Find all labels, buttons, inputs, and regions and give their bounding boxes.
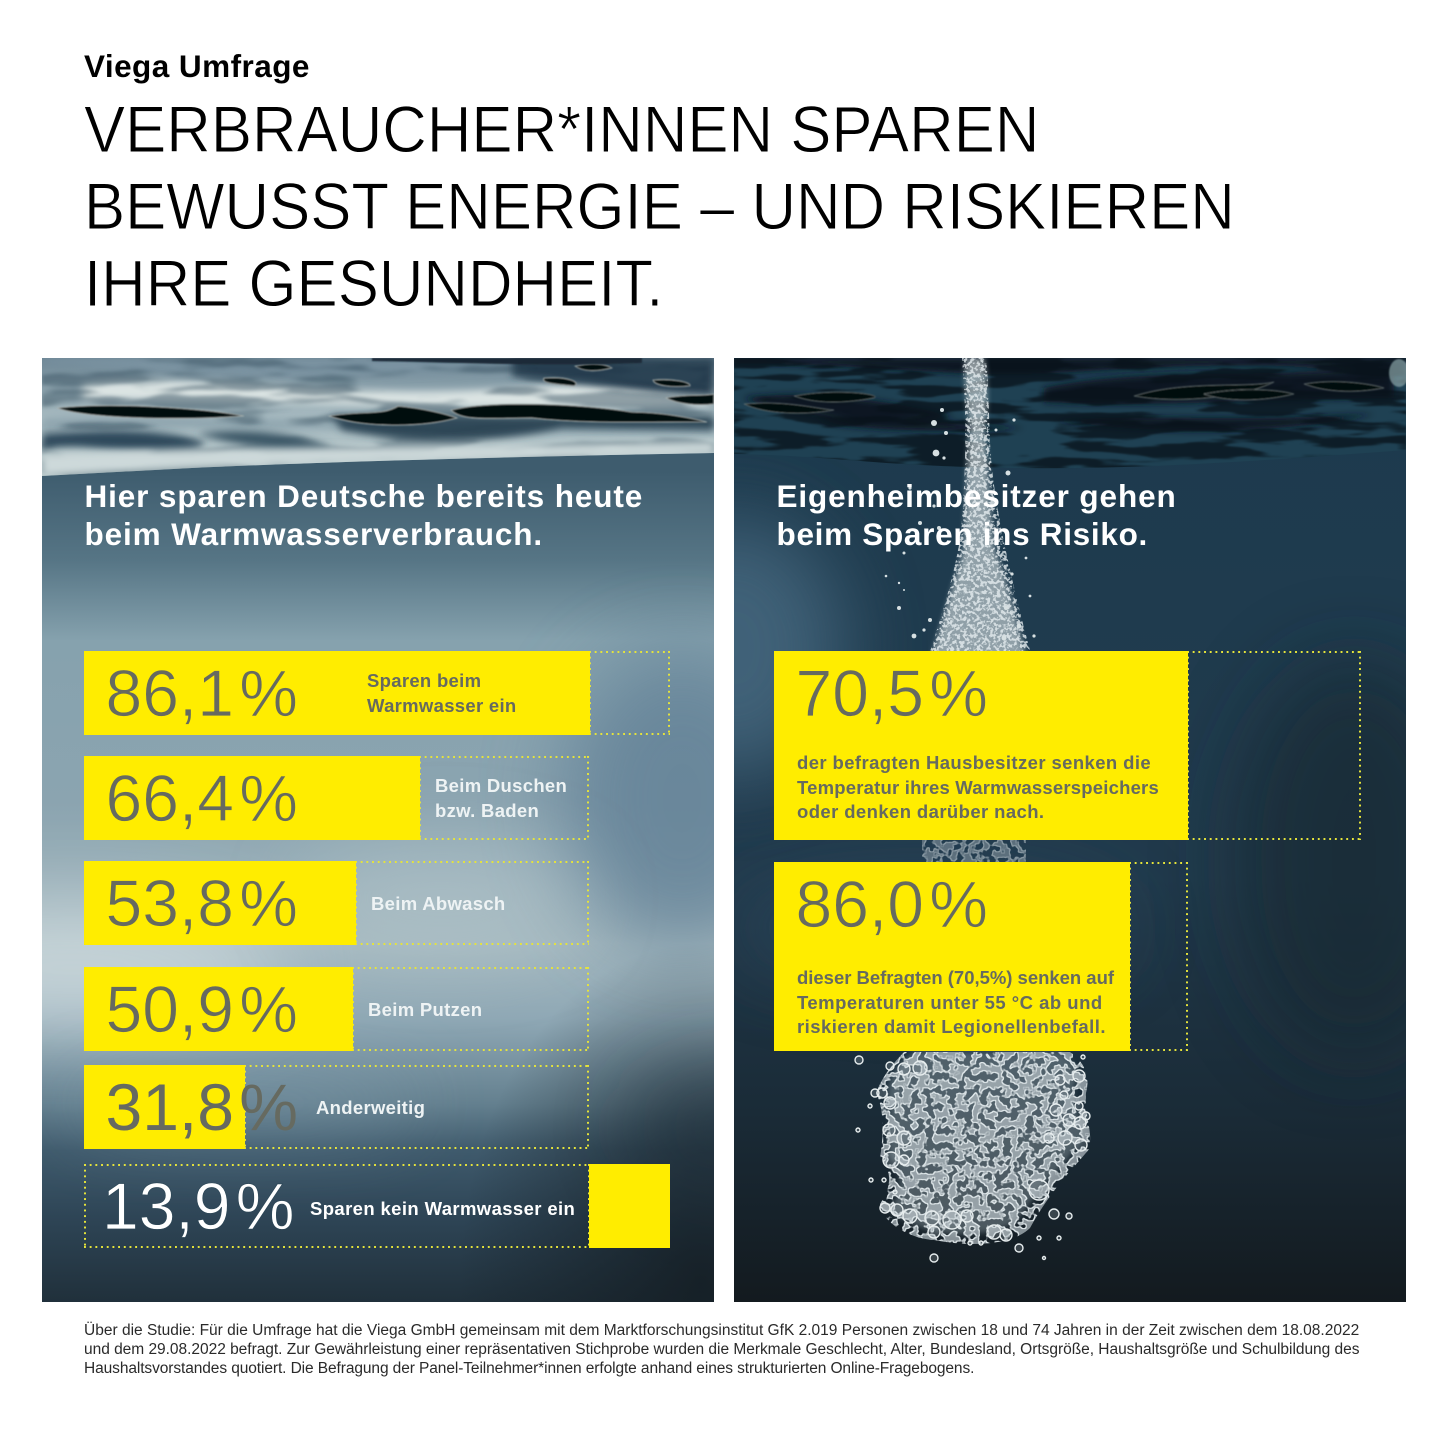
- callout: 86,0 %: riskieren damit Legionellenbefall.: [797, 1016, 1106, 1037]
- bar: 53,8 % abwasch: Beim Abwasch: [371, 893, 506, 914]
- bar: 66,4 % duschen: 66,4 %: [106, 761, 298, 835]
- bar: 50,9 % putzen: Beim Putzen: [368, 999, 482, 1020]
- heading: right panel: [776, 478, 1177, 552]
- bubbles between boxes: [922, 840, 1026, 864]
- footnote: study info: [84, 1322, 1359, 1377]
- bar: 53,8 % abwasch: [84, 861, 589, 945]
- title: VERBRAUCHER*INNEN SPAREN: [84, 93, 1039, 166]
- bar: 50,9 % putzen: 50,9 %: [106, 972, 298, 1046]
- callout: 70,5 %: 70,5 %: [796, 656, 988, 730]
- bar: 31,8 % anderweitig: Anderweitig: [316, 1097, 425, 1118]
- bar: 53,8 % abwasch: 53,8 %: [106, 866, 298, 940]
- callout: 70,5 %: Temperatur ihres Warmwasserspeichers: [797, 776, 1159, 798]
- bar: 13,9 % sparen kein Warmwasser: Sparen kein Warmwasser ein: [310, 1198, 575, 1219]
- background: underwater photo with water surface: [42, 358, 714, 1302]
- heading: left panel: Hier sparen Deutsche bereits heute: [84, 478, 643, 514]
- water surface: [734, 358, 1406, 468]
- bubble stream: [885, 358, 1036, 658]
- heading: left panel: [84, 478, 643, 552]
- heading: right panel: beim Sparen ins Risiko.: [776, 516, 1148, 552]
- heading: right panel: Eigenheimbesitzer gehen: [776, 478, 1177, 514]
- title: BEWUSST ENERGIE – UND RISKIEREN: [84, 170, 1235, 243]
- bar: 13,9 % sparen kein Warmwasser: 13,9 %: [102, 1169, 294, 1243]
- bar: 66,4 % duschen: Beim Duschen: [435, 775, 567, 796]
- bar: 50,9 % putzen: [84, 967, 589, 1051]
- callout: 70,5 %: der befragten Hausbesitzer senken die: [797, 752, 1151, 773]
- footnote: study info: Über die Studie: Für die Umfrage hat die Viega GmbH gemeinsam mit dem Marktforschungsinstitut GfK 2.019 Personen zwischen 18 und 74 Jahren in der Zeit zwischen dem 18.08.2022: [84, 1322, 1359, 1339]
- callout: 86,0 %: [774, 862, 1188, 1051]
- bar: 66,4 % duschen: bzw. Baden: [435, 800, 539, 820]
- kicker: Viega Umfrage: Viega Umfrage: [84, 48, 310, 84]
- callout: 86,0 %: 86,0 %: [796, 867, 988, 941]
- bar: 66,4 % duschen: [84, 756, 589, 840]
- background: underwater photo with rising bubbles: [734, 358, 1406, 1302]
- footnote: study info: und dem 29.08.2022 befragt. Zur Gewährleistung einer repräsentativen Stichprobe wurden die Merkmale Geschlecht, Alter, Bundesland, Ortsgröße, Haushaltsgröße und Schulbildung des: [84, 1341, 1359, 1358]
- title: IHRE GESUNDHEIT.: [84, 247, 663, 320]
- bar: 86,1 % sparen beim Warmwasser: [84, 651, 670, 735]
- callout: 86,0 %: Temperaturen unter 55 °C ab und: [797, 992, 1103, 1012]
- title: [84, 93, 1235, 320]
- bar: 86,1 % sparen beim Warmwasser: Warmwasser ein: [367, 694, 517, 716]
- callout: 86,0 %: dieser Befragten (70,5%) senken auf: [797, 967, 1114, 988]
- footnote: study info: Haushaltsvorstandes quotiert. Die Befragung der Panel-Teilnehmer*innen erfolgte anhand eines strukturierten Online-Fragebogens.: [84, 1360, 974, 1377]
- bar: 13,9 % sparen kein Warmwasser: [84, 1164, 670, 1248]
- bar: 31,8 % anderweitig: 31,8 %: [106, 1070, 298, 1144]
- callout: 70,5 %: [774, 651, 1361, 840]
- panel: left, hot water savings: [42, 358, 714, 1302]
- bar: 31,8 % anderweitig: [84, 1065, 589, 1149]
- callout: 70,5 %: oder denken darüber nach.: [797, 801, 1044, 822]
- bar: 86,1 % sparen beim Warmwasser: Sparen beim: [367, 670, 481, 691]
- bubble cluster: [855, 1052, 1090, 1262]
- bar: 86,1 % sparen beim Warmwasser: 86,1 %: [106, 656, 298, 730]
- panel: right, risk for homeowners: [734, 358, 1406, 1302]
- heading: left panel: beim Warmwasserverbrauch.: [84, 516, 543, 552]
